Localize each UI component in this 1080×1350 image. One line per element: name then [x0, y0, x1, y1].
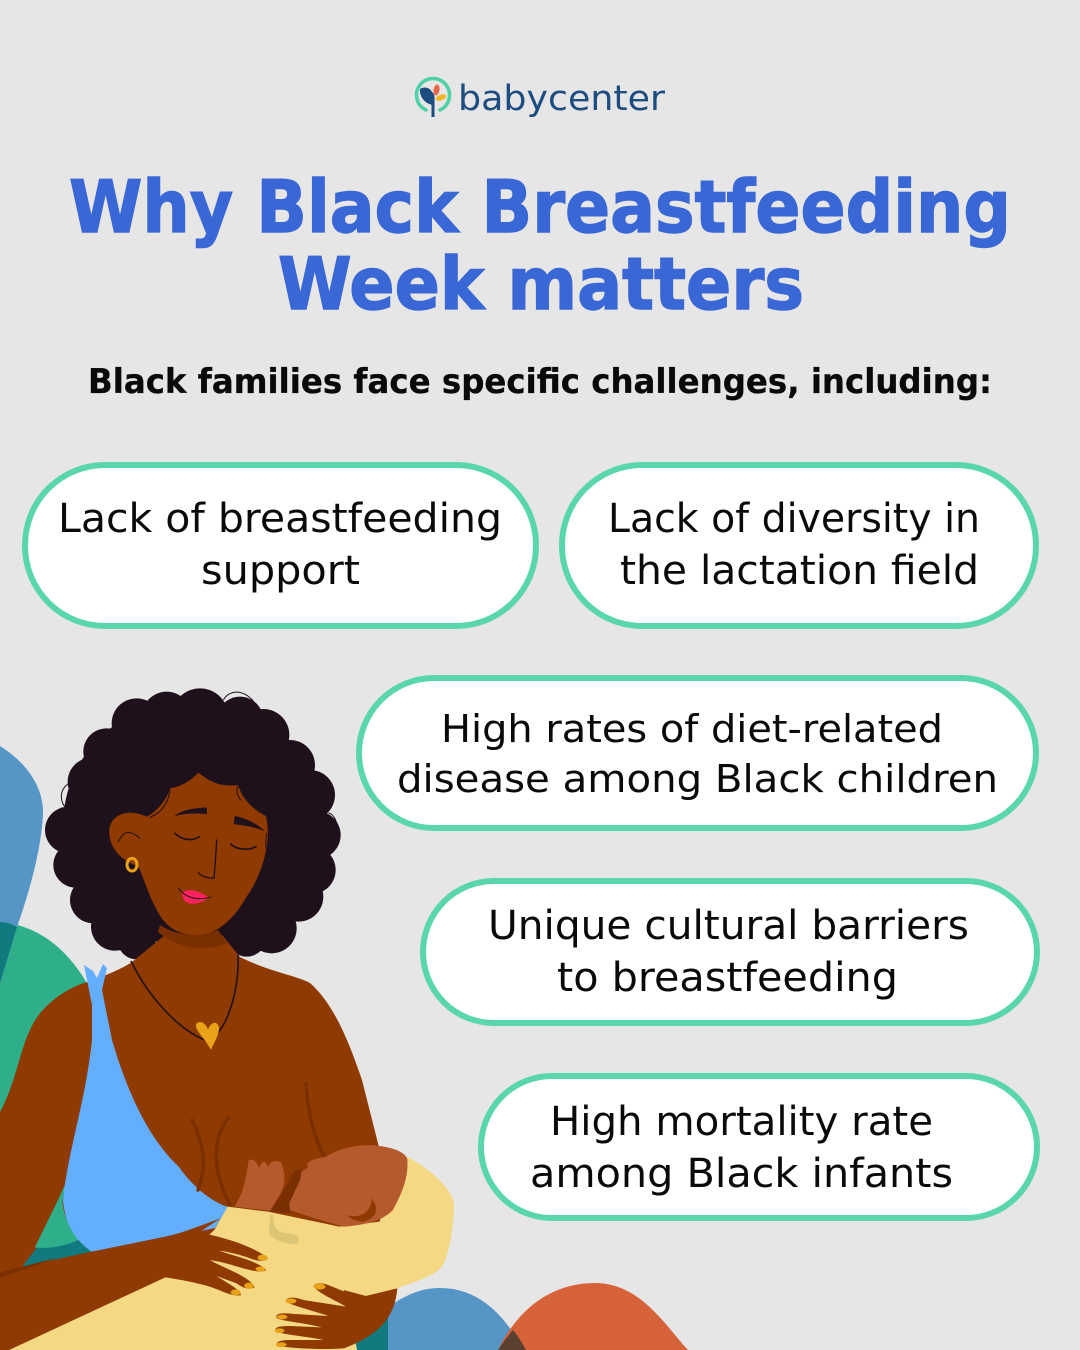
fingernails [231, 1255, 325, 1347]
lower hand [275, 1283, 397, 1349]
title: Week matters [278, 242, 804, 326]
illustration: mother and baby [0, 688, 454, 1350]
pill: infant mortality [481, 1076, 1037, 1218]
pill: lack of diversity [562, 465, 1036, 626]
background blobs [0, 746, 688, 1350]
necklace [131, 955, 238, 1050]
pill: cultural barriers: to breastfeeding [557, 955, 898, 1001]
lips [178, 888, 211, 904]
pill: diet-related disease: disease among Black children [397, 757, 998, 801]
facial features [118, 785, 268, 878]
hair [45, 688, 341, 959]
upper arm and hand [0, 1218, 268, 1350]
pill: diet-related disease [359, 678, 1036, 828]
pill: lack of breastfeeding support: Lack of breastfeeding [58, 496, 502, 542]
icon: sprout in ring [416, 79, 450, 117]
logo wordmark: babycenter [458, 79, 666, 119]
blanket [9, 1157, 454, 1350]
pill: lack of breastfeeding support: support [201, 548, 360, 594]
blanket fold [269, 1215, 299, 1244]
pill: lack of diversity: the lactation field [620, 548, 979, 594]
breast lines [192, 1084, 326, 1205]
pill: cultural barriers: Unique cultural barriers [488, 903, 969, 949]
blue garment [63, 964, 228, 1252]
title: Why Black Breastfeeding [69, 165, 1011, 249]
green and teal gap behind arm [22, 1180, 92, 1267]
pill: cultural barriers [423, 881, 1037, 1023]
pill: infant mortality: High mortality rate [550, 1099, 933, 1145]
title [69, 165, 1011, 326]
baby and arms [0, 1145, 454, 1350]
shadow by baby's mouth [270, 1169, 302, 1213]
earring [127, 858, 137, 871]
arm crease [0, 1257, 58, 1278]
pill: diet-related disease: High rates of diet-related [441, 707, 943, 751]
logo: babycenter [416, 79, 666, 119]
baby hand [234, 1159, 284, 1211]
neck shadow [158, 925, 227, 948]
face [109, 773, 268, 935]
pill: infant mortality: among Black infants [530, 1151, 953, 1197]
pill: lack of breastfeeding support [25, 465, 536, 626]
baby head [288, 1145, 408, 1227]
pill: lack of diversity: Lack of diversity in [608, 496, 980, 542]
baby ear [347, 1198, 376, 1222]
torso and back arm [0, 935, 396, 1350]
subtitle: Black families face specific challenges, including: [88, 362, 992, 402]
